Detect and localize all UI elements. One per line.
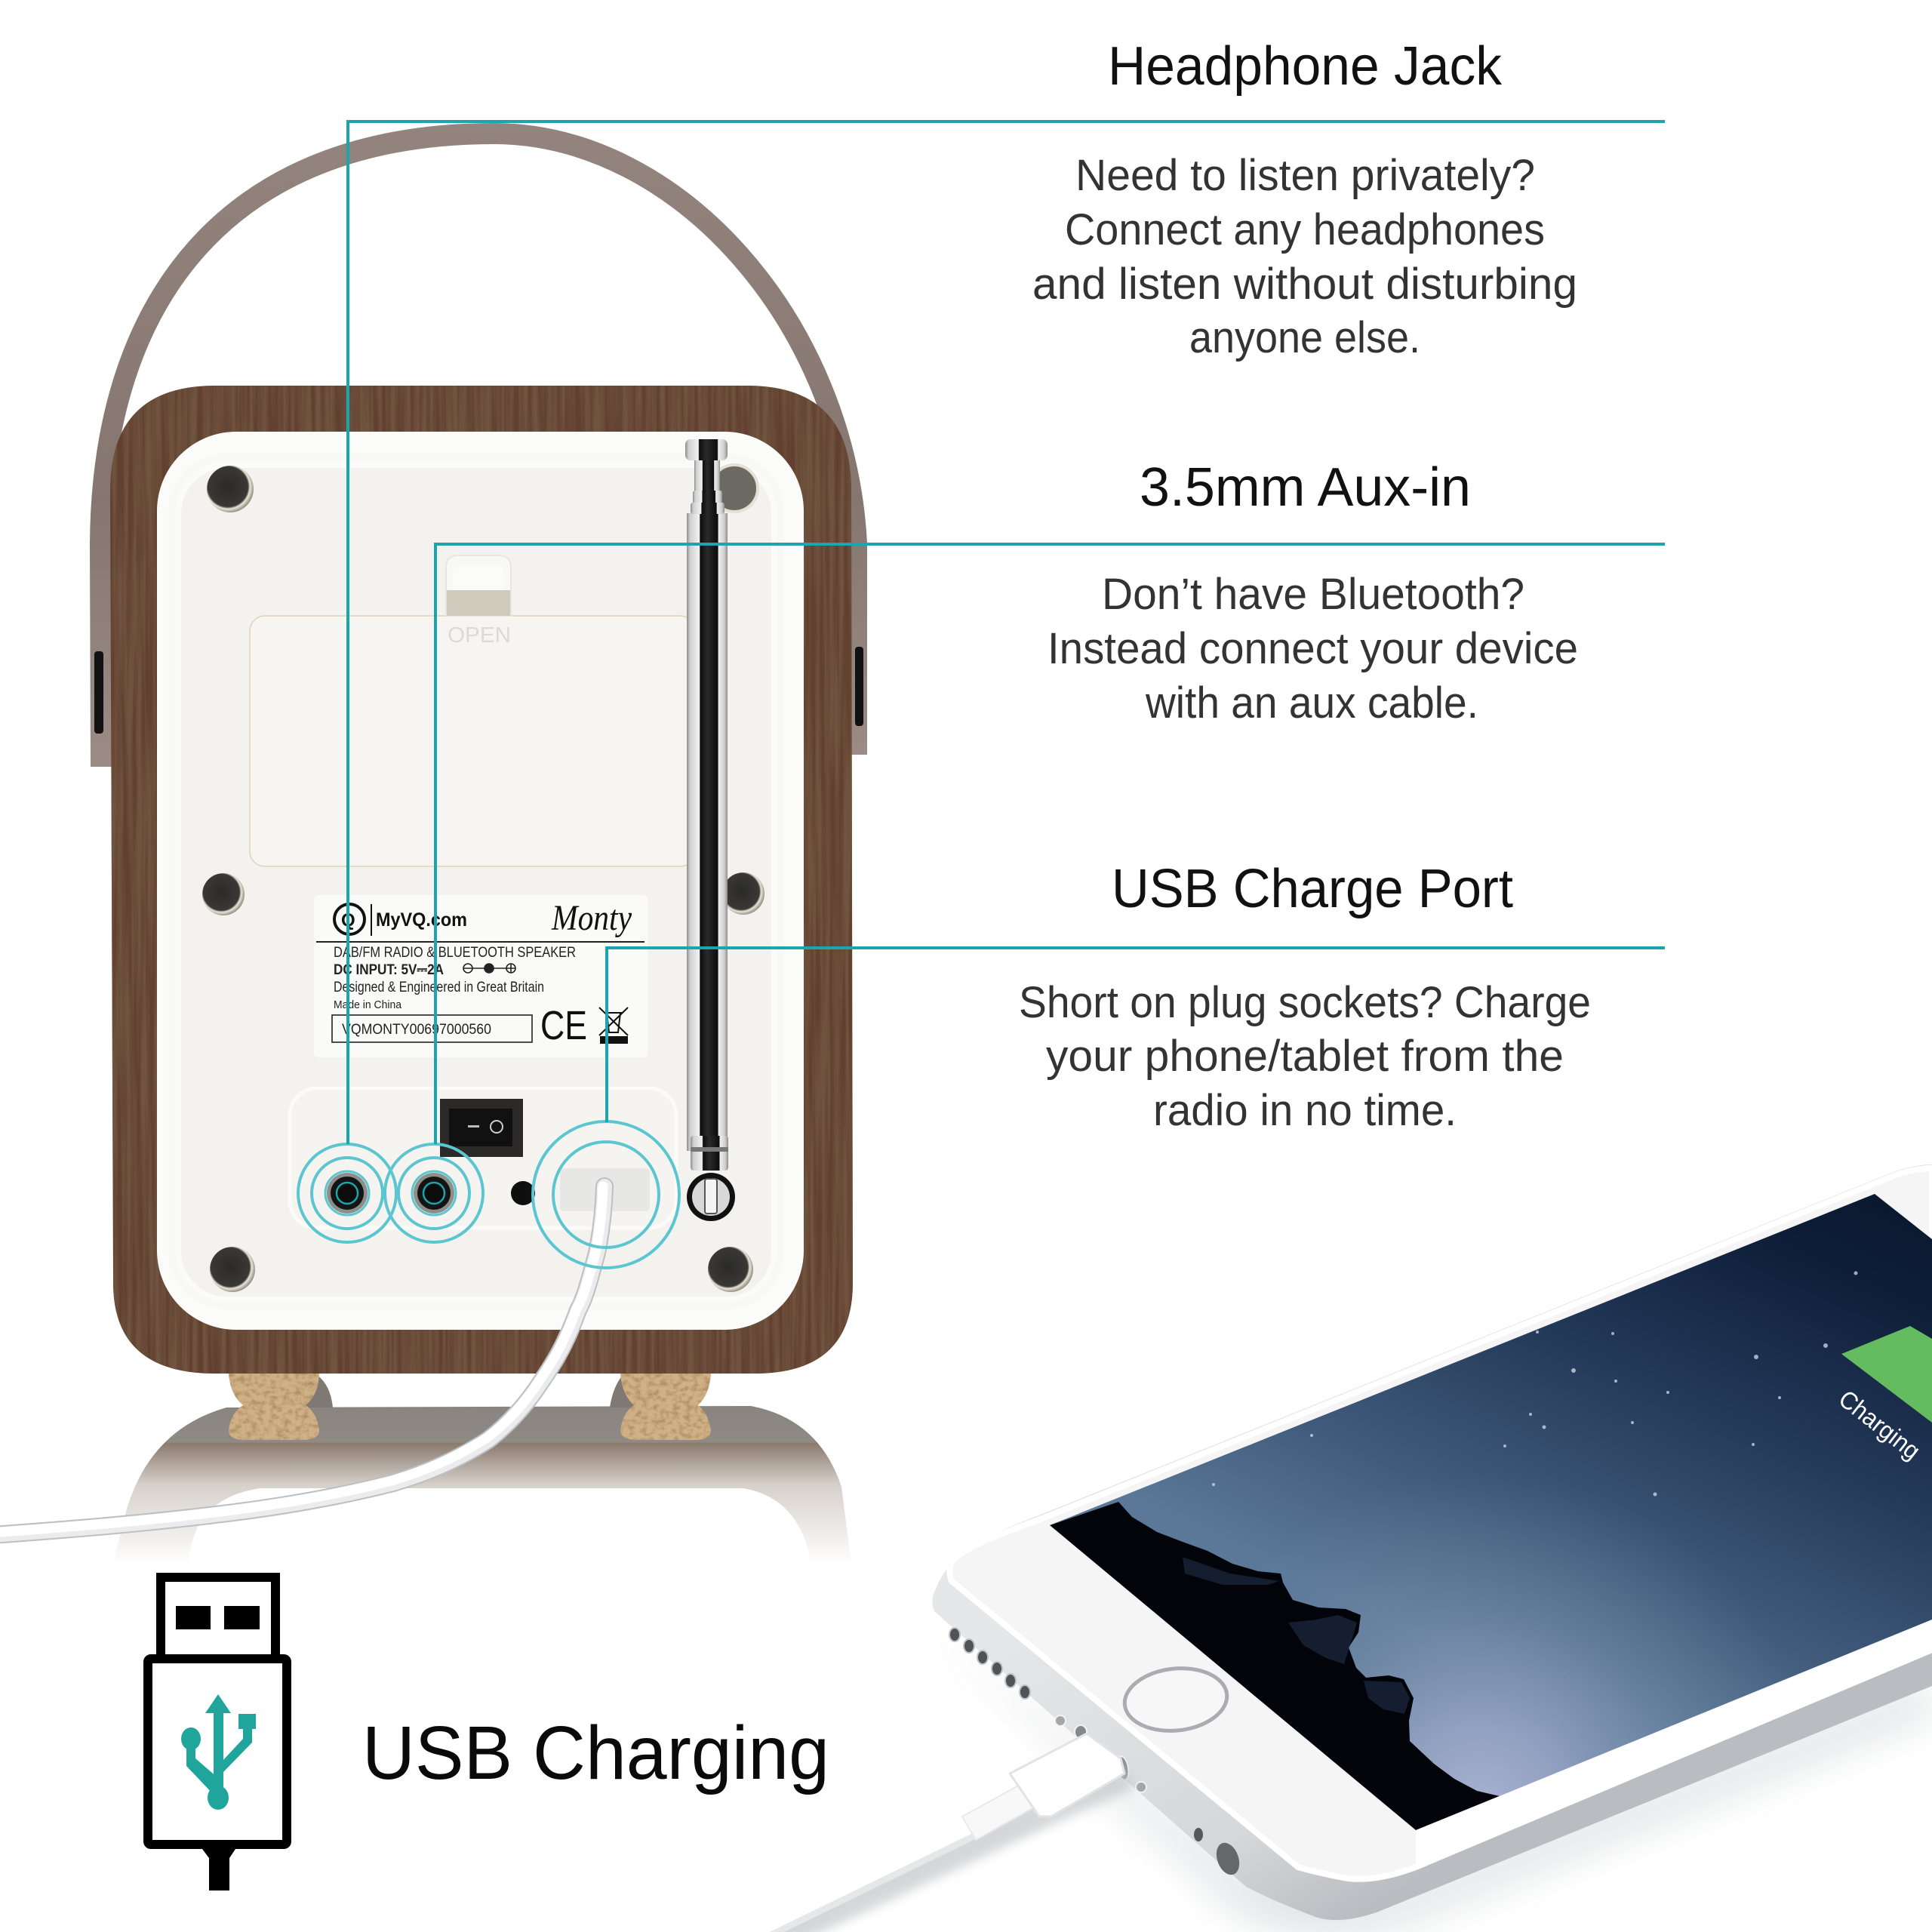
text: USB charge port description: your phone/tablet from the <box>1046 1032 1564 1081</box>
screws <box>202 465 764 1292</box>
phone: speaker holes <box>949 1628 1030 1699</box>
OPEN embossed text: OPEN <box>448 623 511 648</box>
radio: foot shadows <box>302 1375 641 1407</box>
headphone jack <box>327 1173 368 1214</box>
callout line: aux-in <box>435 544 1665 1144</box>
callout line: headphone jack <box>348 122 1665 1144</box>
phone: home button <box>1121 1663 1230 1736</box>
phone: lit mountain faces <box>1183 1557 1410 1714</box>
heading: 3.5mm Aux-in: 3.5mm Aux-in <box>1140 457 1471 518</box>
product label: Q <box>341 910 355 931</box>
text: headphone jack description: Connect any headphones <box>1065 205 1545 254</box>
phone: battery indicator <box>1841 1326 1932 1423</box>
text: headphone jack description <box>1032 151 1577 362</box>
phone: aluminium edge <box>932 1164 1932 1920</box>
text: headphone jack description: and listen without disturbing <box>1032 260 1577 309</box>
phone: side details <box>1055 1715 1244 1878</box>
aux jack <box>414 1173 454 1214</box>
highlight rings: aux jack <box>385 1144 483 1242</box>
text: aux-in description: Don’t have Bluetooth? <box>1102 570 1524 619</box>
phone <box>750 1164 1932 1932</box>
USB port <box>560 1168 650 1211</box>
heading: USB Charging: USB Charging <box>362 1711 829 1795</box>
text: USB charge port description: Short on plug sockets? Charge <box>1019 978 1591 1027</box>
text: aux-in description: with an aux cable. <box>1145 678 1478 728</box>
product label: Monty <box>551 898 632 938</box>
radio: walnut body <box>106 381 860 1377</box>
antenna <box>685 439 735 1221</box>
callout line: USB charge port <box>607 948 1665 1122</box>
text: headphone jack description: Need to listen privately? <box>1075 151 1535 200</box>
phone: white bezel band <box>1416 1620 1932 1867</box>
power switch <box>440 1099 523 1157</box>
USB cable from radio <box>0 1186 605 1535</box>
radio: cork feet <box>226 1370 713 1441</box>
text: aux-in description <box>1048 570 1578 728</box>
radio: white back panel <box>157 432 804 1330</box>
product label: DC INPUT: 5V⎓2A <box>334 962 444 978</box>
product label: MyVQ.com <box>376 909 467 931</box>
product label: Made in China <box>334 998 402 1011</box>
product label: DAB/FM RADIO & BLUETOOTH SPEAKER <box>334 945 576 961</box>
phone: lightning connector and cable <box>750 1734 1128 1932</box>
icon: USB stick <box>148 1577 287 1890</box>
highlight rings: headphone jack <box>298 1144 396 1242</box>
product label: CE <box>540 1003 587 1048</box>
heading: USB Charge Port: USB Charge Port <box>1112 859 1513 919</box>
product label: Designed & Engineered in Great Britain <box>334 980 544 995</box>
text: headphone jack description: anyone else. <box>1189 313 1420 362</box>
product label: VQMONTY00697000560 <box>342 1022 491 1038</box>
phone: screen <box>1041 1185 1932 1849</box>
DC input hole <box>511 1181 535 1205</box>
phone: white front face <box>949 1168 1932 1879</box>
highlight rings: USB port <box>533 1121 679 1268</box>
radio: leather handle <box>94 134 863 767</box>
text: aux-in description: Instead connect your device <box>1048 624 1578 673</box>
battery cover <box>250 555 695 866</box>
text: USB charge port description: radio in no time. <box>1153 1086 1457 1135</box>
text: USB charge port description <box>1019 978 1591 1135</box>
connector recess <box>290 1088 676 1228</box>
product label <box>314 895 648 1057</box>
phone: Charging label: Charging <box>1834 1384 1926 1465</box>
heading: Headphone Jack: Headphone Jack <box>1108 36 1503 97</box>
radio reflection <box>113 1406 851 1564</box>
phone: mountain silhouette <box>1050 1502 1500 1830</box>
